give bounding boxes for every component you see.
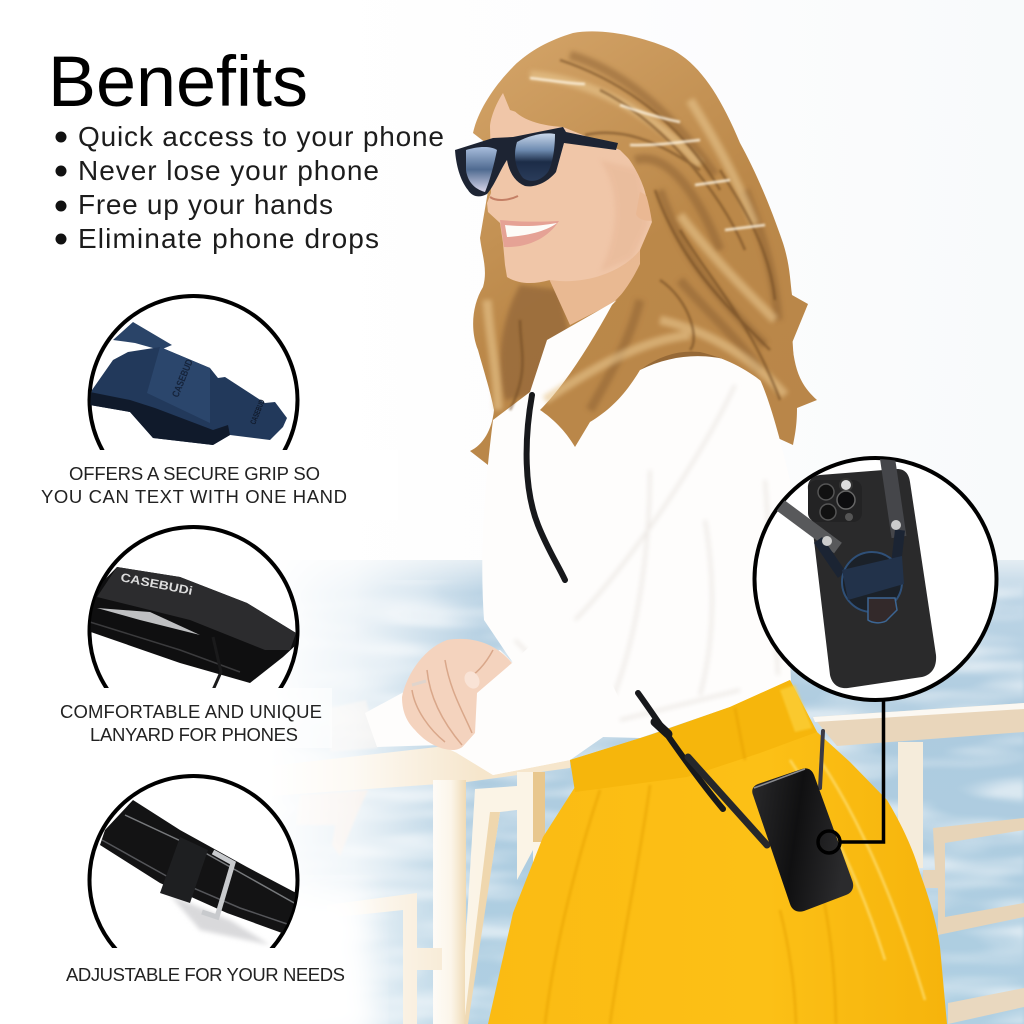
strap xyxy=(100,800,300,935)
ring grip xyxy=(842,552,902,612)
lower strap xyxy=(638,693,723,809)
skirt xyxy=(488,680,947,1024)
white fade over left side xyxy=(0,0,480,1024)
hair dark depth xyxy=(626,255,745,370)
left top rail xyxy=(270,747,570,796)
detail circle: buckle xyxy=(88,774,300,948)
tan inner post xyxy=(533,772,545,842)
tan inner edge xyxy=(464,812,500,1024)
caption: grip line 2: YOU CAN TEXT WITH ONE HAND xyxy=(41,486,347,507)
strap lower edge xyxy=(102,840,290,925)
waistband xyxy=(570,680,817,792)
lanyard brand: CASEBUDi xyxy=(119,570,194,598)
bottom right rail xyxy=(948,988,1024,1024)
sunglasses xyxy=(455,127,618,196)
hair dark under chin xyxy=(500,285,568,400)
connector line from phone to inset xyxy=(840,698,884,842)
metal buckle xyxy=(202,852,233,917)
balcony railing xyxy=(270,703,1024,1024)
lower shadow band xyxy=(90,392,230,445)
silver sheen xyxy=(97,608,200,635)
detail circle: grip xyxy=(88,294,300,450)
upper strap xyxy=(113,322,172,350)
ring xyxy=(412,681,426,685)
benefits list: Never lose your phone xyxy=(78,155,379,186)
woman xyxy=(365,31,947,1024)
left main post xyxy=(433,780,466,1024)
padded top band xyxy=(97,567,296,650)
water texture xyxy=(260,580,1024,1024)
fingers xyxy=(412,650,493,745)
lanyard band xyxy=(85,567,296,683)
rivets xyxy=(822,536,832,546)
top plate xyxy=(147,347,210,423)
caption: lanyard: COMFORTABLE AND UNIQUE xyxy=(60,701,322,722)
caption: grip: OFFERS A SECURE GRIP SO xyxy=(69,463,320,484)
caption: lanyard line 2: LANYARD FOR PHONES xyxy=(90,724,298,745)
caption: buckle: ADJUSTABLE FOR YOUR NEEDS xyxy=(66,964,345,985)
upper strap xyxy=(527,395,565,580)
lower tab xyxy=(868,598,897,623)
hair dark strands xyxy=(510,60,780,410)
mouth xyxy=(500,220,559,247)
benefits list xyxy=(56,121,444,254)
buckle shadow xyxy=(172,898,266,945)
cheek shade xyxy=(600,160,648,272)
small marker circle on phone xyxy=(818,831,840,853)
hand xyxy=(402,639,512,750)
stitch line xyxy=(90,622,240,672)
shirt xyxy=(365,300,791,775)
benefits list: Quick access to your phone xyxy=(78,121,444,152)
ear xyxy=(636,192,654,221)
phone case xyxy=(808,469,936,688)
grip body xyxy=(90,347,287,445)
keeper loop xyxy=(160,837,208,903)
hair broad shadows xyxy=(570,55,778,410)
left inner frame xyxy=(465,772,545,1024)
grip brand: CASEBUD xyxy=(171,358,196,399)
face xyxy=(487,93,652,283)
skirt highlights xyxy=(790,760,925,1000)
lower left fade xyxy=(240,890,375,1024)
dark connectors xyxy=(818,530,900,575)
right post xyxy=(898,742,923,868)
nostril shade xyxy=(490,196,518,200)
grip plate xyxy=(842,556,904,600)
hair broad lights xyxy=(487,75,785,410)
right top rail xyxy=(813,703,1024,746)
left strap xyxy=(780,505,838,548)
strap gloss xyxy=(125,815,296,904)
cord xyxy=(213,637,221,690)
camera module xyxy=(808,478,856,521)
hair front fringe xyxy=(506,37,795,447)
sleeve over wrist xyxy=(457,630,620,775)
shirt folds xyxy=(480,385,778,755)
end tab brand: CASEBUD xyxy=(249,398,267,426)
benefits list: Free up your hands xyxy=(78,189,333,220)
hair back mass xyxy=(470,31,817,472)
far arm faded xyxy=(330,700,378,752)
right strap xyxy=(887,455,899,537)
thumb nail xyxy=(461,669,483,691)
title: Benefits xyxy=(48,43,308,122)
neck xyxy=(545,240,640,325)
hair white glints xyxy=(530,78,765,230)
lower left frame xyxy=(327,893,442,1024)
inset circle: phone back with grip xyxy=(754,455,996,700)
phone hanging on skirt xyxy=(752,768,853,912)
benefits list: Eliminate phone drops xyxy=(78,223,379,254)
detail circle: lanyard xyxy=(88,525,300,688)
photo background: sea xyxy=(260,560,1024,1024)
far hand faded xyxy=(296,790,368,856)
waist highlight xyxy=(780,685,812,732)
skirt folds xyxy=(545,708,836,1024)
phone lanyard strap xyxy=(527,395,823,845)
right square frame xyxy=(923,818,1024,935)
